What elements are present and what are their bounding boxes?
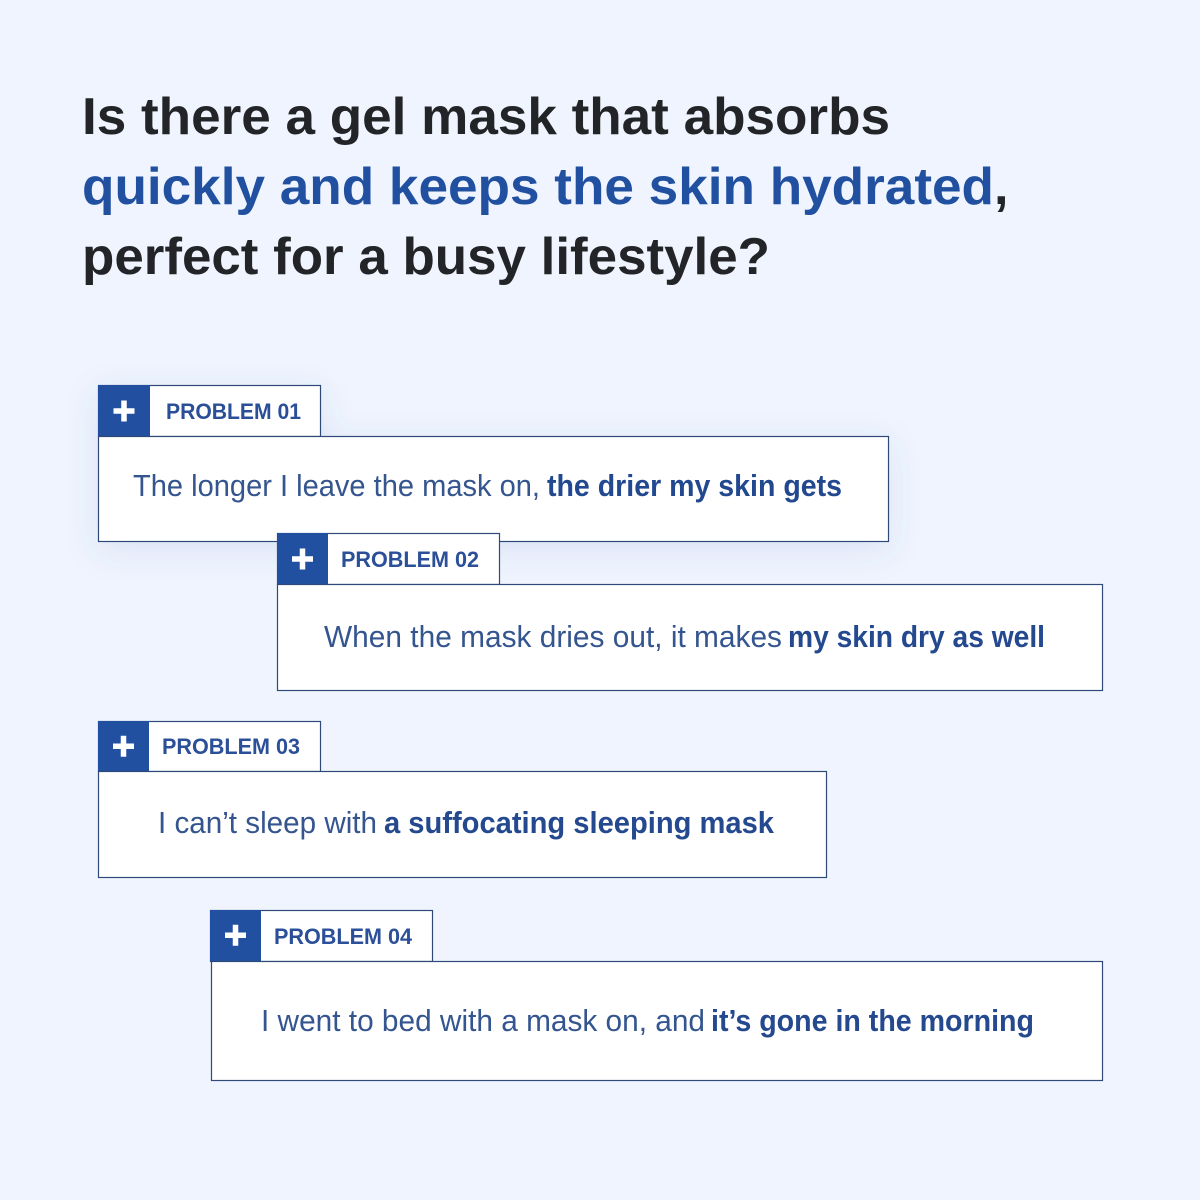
card: problem 04 text [212,962,1102,1080]
panel: problem 02 [277,533,1102,690]
title: , [994,158,1008,216]
panel: problem 03 [98,721,826,878]
card: problem 01 text [98,436,888,542]
tab: problem 01 label: PROBLEM 01 [166,399,301,424]
tab: problem 03 label: PROBLEM 03 [162,734,300,759]
panel: problem 01 [98,385,888,542]
panel: problem 04 [210,910,1102,1080]
card: problem 04 text: I went to bed with a mask on, and [261,1003,705,1038]
title: Is there a gel mask that absorbs [82,88,890,146]
card: problem 01 text: The longer I leave the mask on, [133,468,540,503]
card: problem 01 text: the drier my skin gets [547,468,842,503]
card: problem 03 text: I can’t sleep with [158,805,377,840]
title [82,88,1008,286]
card: problem 03 text: a suffocating sleeping mask [384,805,775,840]
card: problem 02 text: my skin dry as well [788,619,1045,654]
tab: problem 04 label: PROBLEM 04 [274,924,413,949]
title: quickly and keeps the skin hydrated [82,158,994,216]
card: problem 04 text: it’s gone in the morning [711,1003,1034,1038]
title: perfect for a busy lifestyle? [82,228,770,286]
card: problem 03 text [98,772,826,878]
tab: problem 03 label [98,721,320,772]
tab: problem 04 label [210,910,432,962]
tab: problem 02 label: PROBLEM 02 [341,547,479,572]
tab: problem 01 label [98,385,320,437]
tab: problem 02 label [277,533,500,585]
card: problem 02 text [278,584,1102,690]
card: problem 02 text: When the mask dries out, it makes [324,619,782,654]
